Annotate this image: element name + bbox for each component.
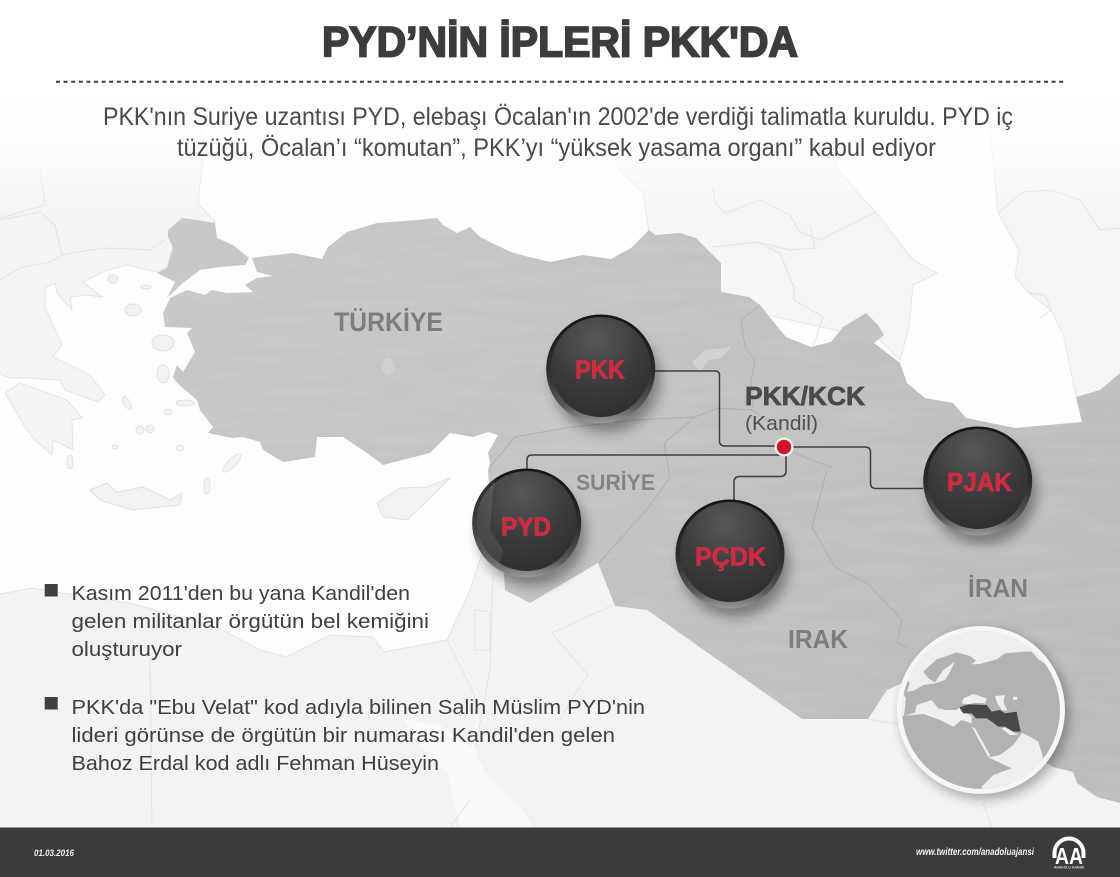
date: 01.03.2016 (34, 848, 75, 859)
twitter url: www.twitter.com/anadoluajansi (916, 847, 1034, 858)
land: Balkans and Greece (0, 84, 215, 402)
background map (0, 153, 1120, 828)
land: Crete (90, 483, 182, 510)
connector lines (527, 371, 923, 503)
country labels: TÜRKİYE (334, 307, 443, 337)
bullet two: lideri görünse de örgütün bir numarası Kandil'den gelen (72, 724, 615, 747)
node: PÇDK: PÇDK (695, 542, 766, 572)
bullet one: Kasım 2011'den bu yana Kandil'den (72, 582, 410, 605)
bullet one: gelen militanlar örgütün bel kemiğini (72, 610, 429, 633)
node: PJAK (923, 426, 1037, 544)
land: Caucasus (600, 84, 937, 360)
internal borders (490, 305, 908, 648)
land: Cyprus (377, 478, 450, 520)
land: Aegean islands (67, 275, 243, 494)
icon: agency logo: ANADOLU AJANSI (1054, 866, 1084, 870)
bullet two: PKK'da "Ebu Velat" kod adıyla bilinen Salih Müslim PYD'nin (72, 696, 645, 719)
inset locator map (890, 620, 1077, 807)
land: Peloponnese (5, 383, 82, 455)
bullet one (45, 582, 429, 661)
inset: Caspian Sea (995, 695, 1007, 711)
node: PKK (546, 314, 660, 432)
inset: Persian Gulf (1002, 727, 1018, 735)
bullet list (45, 582, 645, 775)
Kandil label: PKK/KCK (745, 381, 865, 411)
inset: Arctic and Atlantic (906, 631, 1044, 692)
inset: Atlantic west (902, 694, 906, 716)
icon: agency logo: AA (1055, 843, 1083, 869)
intro text: PKK'nın Suriye uzantısı PYD, elebaşı Öcalan'ın 2002'de verdiği talimatla kuruldu. PYD iç (103, 103, 1013, 131)
intro text (103, 103, 1013, 162)
inset: Arabian Sea (982, 732, 1044, 789)
node: PJAK: PJAK (947, 467, 1012, 497)
Kandil label (745, 381, 865, 435)
bullet two: Bahoz Erdal kod adlı Fehman Hüseyin (72, 752, 439, 775)
inset: Mediterranean (905, 700, 972, 727)
node: PYD: PYD (501, 512, 551, 542)
bullet two (45, 696, 645, 775)
inset: highlighted region (959, 704, 1021, 732)
lakes (382, 347, 731, 376)
land: Central Asia (985, 84, 1120, 422)
intro text: tüzüğü, Öcalan’ı “komutan”, PKK’yı “yüksek yasama organı” kabul ediyor (177, 134, 936, 162)
Kandil label: (Kandil) (745, 412, 818, 435)
title: PYD’NİN İPLERİ PKK'DA (322, 18, 798, 66)
bullet one: oluşturuyor (72, 638, 182, 661)
border lines on light land (0, 170, 1120, 827)
land: Africa and Arabia (0, 500, 1120, 835)
Red Sea (401, 705, 533, 827)
grey region: Türkiye, Syria, Iraq, Iran (150, 215, 1120, 805)
inset: Black Sea (962, 694, 987, 704)
footer bar (0, 828, 1120, 877)
country labels: İRAN (968, 573, 1028, 603)
country labels: IRAK (788, 624, 848, 654)
inset: Aral Sea (1013, 697, 1017, 700)
node: PÇDK (676, 500, 789, 617)
top fade (0, 83, 1120, 217)
node: PKK: PKK (575, 354, 625, 384)
node: PYD (470, 468, 586, 586)
Kandil marker (774, 438, 794, 456)
country labels (334, 307, 1028, 654)
country labels: SURİYE (576, 470, 655, 495)
inset: Red Sea (972, 727, 990, 757)
